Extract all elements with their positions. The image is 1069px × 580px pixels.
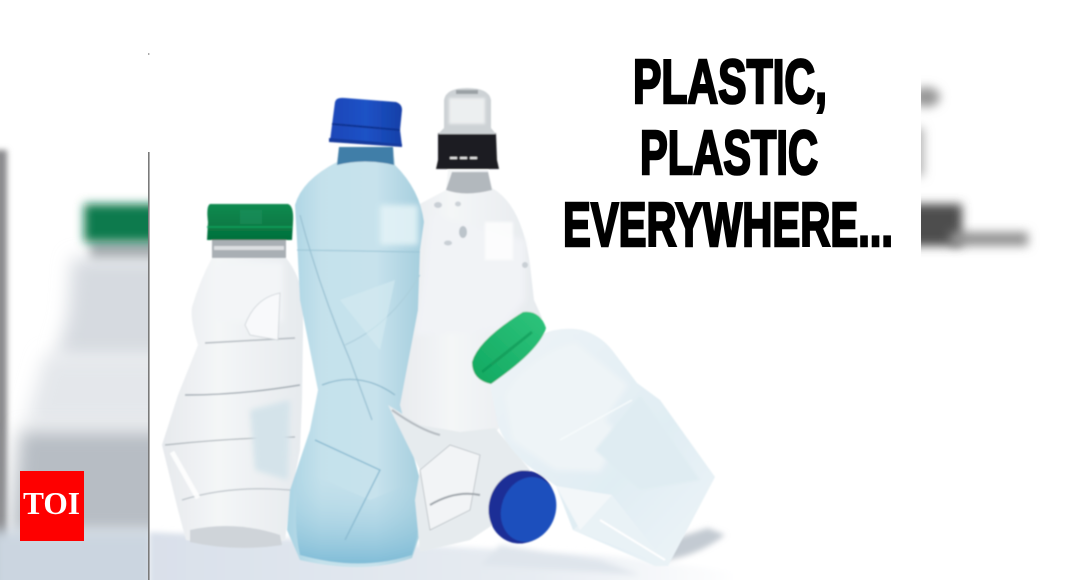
sharp central photo panel — [149, 0, 921, 580]
title: EVERYWHERE... — [563, 191, 893, 260]
blurred left background — [0, 146, 148, 580]
green cap — [207, 204, 293, 240]
bottle: clear with black sport cap — [390, 88, 542, 440]
blue cap — [330, 98, 402, 146]
logo: TOI: TOI — [23, 485, 80, 521]
floor shadow — [149, 528, 740, 580]
bottle: white jug with green cap — [472, 312, 715, 566]
blurred right background — [921, 81, 1034, 255]
clear spout — [438, 88, 496, 134]
vertical divider line — [148, 53, 150, 580]
neck ring — [212, 240, 286, 258]
title: PLASTIC, — [633, 48, 827, 117]
black collar — [436, 133, 499, 169]
logo: TOI — [20, 471, 84, 541]
green cap on jug — [472, 312, 546, 384]
bottle: crumpled clear with green cap — [162, 204, 303, 548]
blue lying cap — [478, 461, 567, 553]
title: PLASTIC — [640, 119, 818, 188]
bottle: crumpled blue with blue cap — [287, 98, 424, 567]
bottle: crumpled clear lying with blue cap — [388, 405, 567, 553]
title — [563, 48, 893, 260]
